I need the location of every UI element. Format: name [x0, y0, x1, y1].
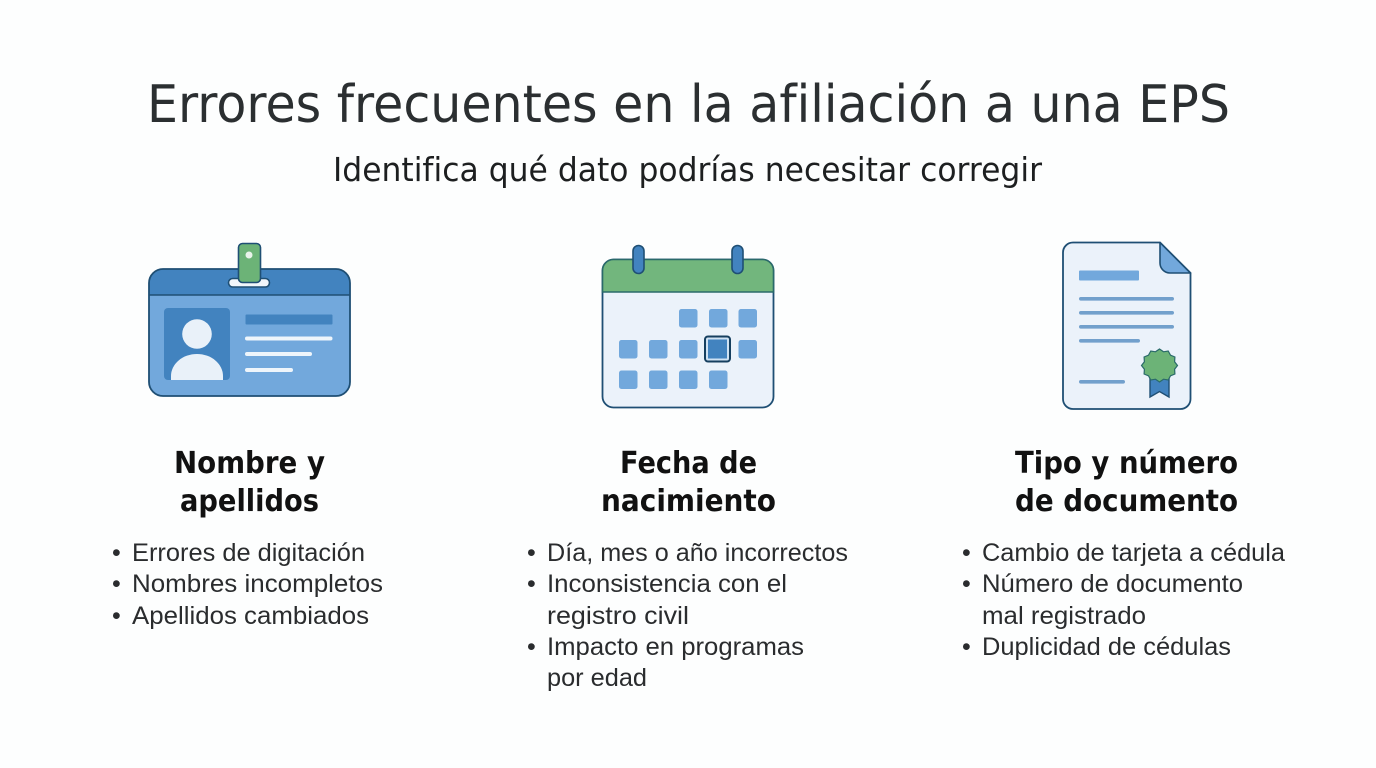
list: tipo y numero de documento: • [962, 633, 971, 661]
list: nombre y apellidos: • [112, 539, 121, 567]
heading: tipo y numero de documento: Tipo y número [1015, 446, 1238, 481]
list: tipo y numero de documento: • [962, 570, 971, 598]
list: fecha de nacimiento: Día, mes o año incorrectos [547, 539, 848, 567]
list: tipo y numero de documento: Cambio de tarjeta a cédula [982, 539, 1285, 567]
list: fecha de nacimiento: • [527, 633, 536, 661]
list: tipo y numero de documento: mal registrado [982, 602, 1146, 630]
list: nombre y apellidos: • [112, 602, 121, 630]
list: nombre y apellidos [112, 539, 383, 630]
list: nombre y apellidos: Apellidos cambiados [132, 602, 369, 630]
panel: tipo y numero de documento [962, 242, 1285, 661]
icon: document with seal [1063, 242, 1190, 409]
panel: fecha de nacimiento [527, 246, 848, 692]
list: tipo y numero de documento: Número de documento [982, 570, 1243, 598]
heading: fecha de nacimiento: Fecha de [620, 446, 757, 481]
list: fecha de nacimiento: por edad [547, 664, 647, 692]
list: tipo y numero de documento [962, 539, 1285, 661]
heading: tipo y numero de documento: de documento [1015, 484, 1238, 519]
list: tipo y numero de documento: Duplicidad de cédulas [982, 633, 1231, 661]
list: tipo y numero de documento: • [962, 539, 971, 567]
heading: nombre y apellidos [174, 446, 325, 519]
list: fecha de nacimiento: registro civil [547, 602, 689, 630]
panel: nombre y apellidos [112, 244, 383, 630]
icon: ID card [149, 244, 350, 396]
list: fecha de nacimiento: Impacto en programas [547, 633, 804, 661]
list: fecha de nacimiento: • [527, 570, 536, 598]
heading: nombre y apellidos: Nombre y [174, 446, 325, 481]
title: Errores frecuentes en la afiliación a una EPS [147, 75, 1230, 135]
list: fecha de nacimiento [527, 539, 848, 692]
list: fecha de nacimiento: Inconsistencia con el [547, 570, 787, 598]
heading: tipo y numero de documento [1015, 446, 1238, 519]
subtitle: Identifica qué dato podrías necesitar corregir [333, 150, 1042, 189]
icon: calendar [602, 246, 774, 408]
list: nombre y apellidos: Nombres incompletos [132, 570, 383, 598]
heading: fecha de nacimiento [601, 446, 776, 519]
list: nombre y apellidos: Errores de digitación [132, 539, 365, 567]
heading: nombre y apellidos: apellidos [180, 484, 319, 519]
heading: fecha de nacimiento: nacimiento [601, 484, 776, 519]
list: nombre y apellidos: • [112, 570, 121, 598]
list: fecha de nacimiento: • [527, 539, 536, 567]
